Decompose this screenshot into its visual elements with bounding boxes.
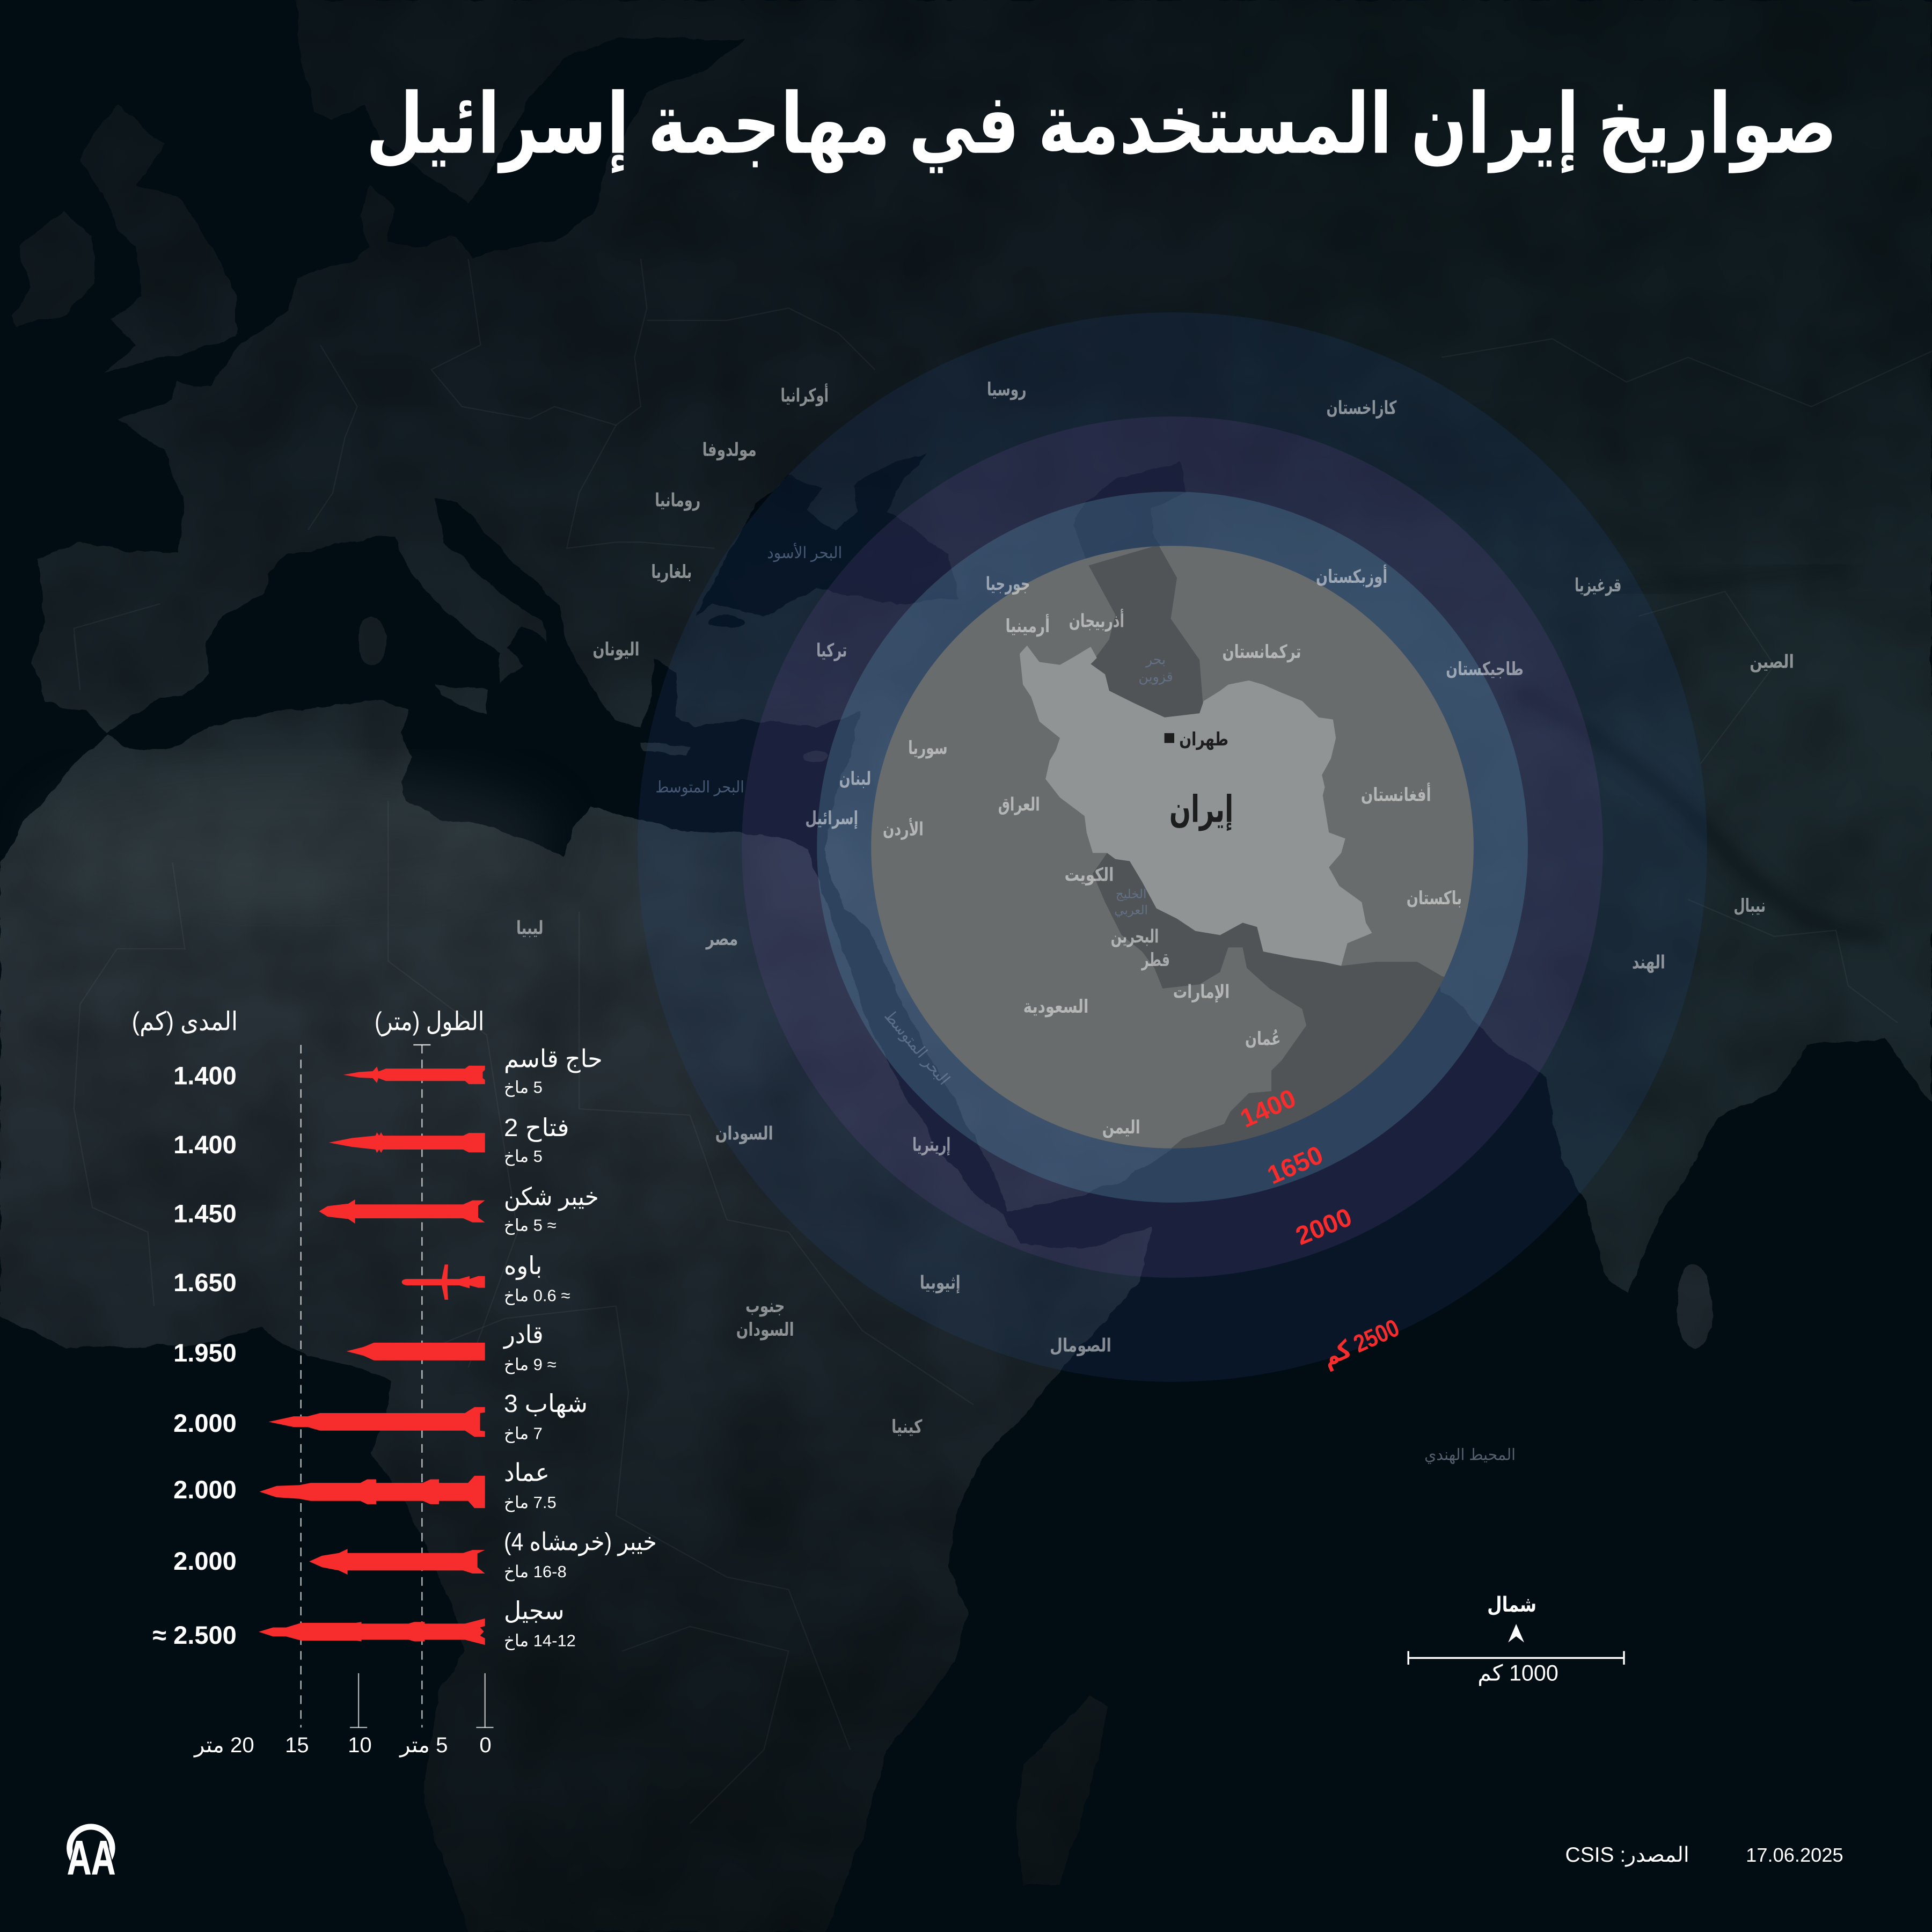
label: Iraq: العراق	[998, 795, 1040, 816]
label: Indian Ocean: المحيط الهندي	[1424, 1446, 1516, 1465]
range: 1.400	[173, 1130, 237, 1159]
label: Russia: روسيا	[987, 379, 1027, 400]
speed: 5 ماخ	[504, 1078, 543, 1097]
scale bar	[1408, 1651, 1624, 1665]
logo: AA	[67, 1827, 115, 1884]
row: Emad	[173, 1459, 557, 1512]
row: Fattah 2	[173, 1114, 569, 1166]
scale label 0: 0	[479, 1733, 492, 1757]
date: 17.06.2025	[1746, 1844, 1843, 1866]
label: Kenya: كينيا	[891, 1417, 923, 1437]
label: Syria: سوريا	[908, 738, 948, 759]
label: Uzbekistan: أوزبكستان	[1316, 564, 1387, 588]
speed: ≈ 0.6 ماخ	[504, 1286, 570, 1305]
label: Nepal: نيبال	[1733, 896, 1766, 916]
missile: Shahab 3	[268, 1407, 485, 1437]
label: Iran: إيران	[1169, 788, 1233, 831]
range labels	[1236, 1084, 1403, 1372]
label: Greece: اليونان	[592, 639, 640, 660]
label: Azerbaijan: أذربيجان	[1069, 609, 1124, 632]
row: Kheibar Shekan	[173, 1182, 599, 1235]
column header: length: الطول (متر)	[375, 1007, 484, 1036]
label: Lebanon: لبنان	[839, 769, 871, 789]
terrain shading	[37, 567, 1885, 936]
label: Moldova: مولدوفا	[702, 440, 757, 460]
label: South Sudan line 2: السودان	[736, 1320, 794, 1341]
range: 1.400	[173, 1061, 237, 1089]
label: Arabian Gulf: الخليج	[1116, 887, 1146, 902]
range label 1650: 1650	[1263, 1140, 1327, 1190]
speed: 7.5 ماخ	[504, 1493, 557, 1512]
missile: Sejjil	[259, 1619, 485, 1645]
label: South Sudan: جنوب	[745, 1296, 785, 1317]
column header: range: المدى (كم)	[132, 1007, 238, 1036]
label: Oman: عُمان	[1245, 1029, 1281, 1049]
missile: Haj Qasem	[343, 1066, 485, 1084]
range: ≈ 2.500	[152, 1621, 237, 1649]
label: Egypt: مصر	[705, 929, 738, 950]
label: north: شمال	[1487, 1593, 1536, 1616]
label: Kazakhstan: كازاخستان	[1327, 398, 1397, 418]
water: Caspian Sea and gulfs	[1089, 545, 1475, 1153]
label: Mediterranean: البحر المتوسط	[655, 778, 744, 796]
land: Ireland	[12, 212, 95, 326]
range circle: 2500 km	[638, 312, 1707, 1382]
label: Kuwait: الكويت	[1065, 865, 1114, 886]
land: Africa	[0, 699, 1151, 1932]
label: Bulgaria: بلغاريا	[651, 562, 692, 582]
missile: Paveh	[402, 1264, 485, 1300]
range: 1.950	[173, 1338, 237, 1367]
map labels	[516, 379, 1794, 1465]
label: Caspian Sea: بحر	[1145, 653, 1166, 668]
scale label 20: 20 متر	[193, 1733, 254, 1758]
name: حاج قاسم	[504, 1044, 603, 1073]
row: Sejjil	[152, 1597, 576, 1650]
scale grid	[301, 1045, 494, 1728]
speed: ≈ 5 ماخ	[504, 1216, 557, 1235]
label: Bahrain: البحرين	[1111, 926, 1159, 947]
label: Pakistan: باكستان	[1407, 888, 1462, 909]
speed: 16-8 ماخ	[504, 1562, 567, 1582]
missile: Kheibar Shekan	[319, 1199, 485, 1224]
scale label 5: 5 متر	[399, 1733, 448, 1758]
north arrow and scale bar	[1408, 1593, 1624, 1686]
label: Afghanistan: أفغانستان	[1361, 782, 1431, 805]
missile chart	[132, 1007, 657, 1758]
label: Red Sea: البحر المتوسط	[881, 1007, 953, 1088]
name: خيبر شكن	[504, 1182, 599, 1211]
label: Somalia: الصومال	[1050, 1336, 1111, 1357]
range circle: 2000 km	[742, 416, 1603, 1278]
row: Paveh	[173, 1252, 570, 1305]
label: Libya: ليبيا	[516, 918, 544, 938]
range: 2.000	[173, 1475, 237, 1504]
label: Eritrea: إريتريا	[912, 1135, 950, 1155]
range circle: 1650 km	[817, 492, 1528, 1203]
label: Turkey: تركيا	[816, 641, 847, 662]
range label 2000: 2000	[1292, 1203, 1356, 1251]
icon: north arrow	[1508, 1624, 1524, 1642]
label: Caspian Sea line 2: قزوين	[1138, 670, 1173, 685]
name: خيبر (خرمشاه 4)	[504, 1527, 657, 1556]
name: عماد	[504, 1459, 550, 1487]
land: Eurasia	[33, 0, 1932, 1294]
row: Haj Qasem	[173, 1044, 603, 1097]
missile: Emad	[259, 1476, 485, 1508]
logo: AA: AA	[67, 1831, 115, 1884]
label: Saudi Arabia: السعودية	[1023, 997, 1088, 1018]
speed: ≈ 9 ماخ	[504, 1355, 557, 1374]
speed: 14-12 ماخ	[504, 1631, 576, 1650]
label: Georgia: جورجيا	[986, 574, 1030, 595]
range label 2500 km: 2500 كم	[1318, 1313, 1403, 1372]
range label 1400: 1400	[1236, 1084, 1300, 1133]
label: Turkmenistan: تركمانستان	[1223, 642, 1301, 663]
scale label 10: 10	[348, 1733, 372, 1757]
label: Ethiopia: إثيوبيا	[920, 1273, 961, 1294]
missile: Fattah 2	[329, 1132, 485, 1153]
label: Qatar: قطر	[1141, 950, 1170, 971]
label: Jordan: الأردن	[883, 818, 924, 840]
land: islands	[358, 616, 1711, 1885]
marker: Tehran	[1165, 733, 1174, 743]
country borders	[74, 259, 1932, 1824]
missile: Khorramshahr 4	[309, 1549, 485, 1575]
label: Ukraine: أوكرانيا	[780, 383, 829, 406]
missile: Qader	[347, 1343, 485, 1360]
range: 2.000	[173, 1547, 237, 1575]
name: شهاب 3	[504, 1389, 588, 1418]
name: قادر	[503, 1321, 544, 1349]
name: فتاح 2	[504, 1114, 569, 1142]
range: 2.000	[173, 1409, 237, 1437]
scale label 15: 15	[285, 1733, 309, 1757]
label: Romania: رومانيا	[655, 491, 700, 511]
label: Yemen: اليمن	[1102, 1117, 1140, 1138]
row: Shahab 3	[173, 1389, 588, 1444]
range circle: 1400 km	[862, 542, 1479, 1158]
label: Sudan: السودان	[715, 1124, 773, 1145]
label: Israel: إسرائيل	[805, 808, 858, 829]
name: باوه	[504, 1252, 542, 1280]
name: سجيل	[504, 1597, 565, 1624]
speed: 5 ماخ	[504, 1147, 543, 1166]
row: Qader	[173, 1321, 557, 1374]
source: المصدر: CSIS	[1565, 1843, 1689, 1867]
logo: AA: AA	[67, 1831, 115, 1884]
land: Great Britain	[80, 105, 237, 372]
speed: 7 ماخ	[504, 1424, 543, 1444]
label: Tehran: طهران	[1179, 729, 1228, 750]
label: Kyrgyzstan: قرغيزيا	[1575, 575, 1621, 596]
range: 1.450	[173, 1199, 237, 1228]
scale label: 1000 كم	[1477, 1661, 1558, 1686]
label: Armenia: أرمينيا	[1005, 613, 1050, 636]
label: India: الهند	[1632, 953, 1665, 974]
inland seas	[696, 452, 1215, 716]
range: 1.650	[173, 1268, 237, 1297]
label: UAE: الإمارات	[1173, 982, 1230, 1002]
land: Iran	[1020, 646, 1372, 966]
label: Tajikistan: طاجيكستان	[1446, 659, 1524, 679]
label: China: الصين	[1750, 652, 1794, 672]
row: Kheibar Khorramshahr 4	[173, 1527, 657, 1582]
label: Black Sea: البحر الأسود	[767, 542, 842, 562]
label: Arabian Gulf line 2: العربي	[1114, 903, 1148, 918]
land: Central and East Asia tone	[1232, 0, 1932, 1294]
